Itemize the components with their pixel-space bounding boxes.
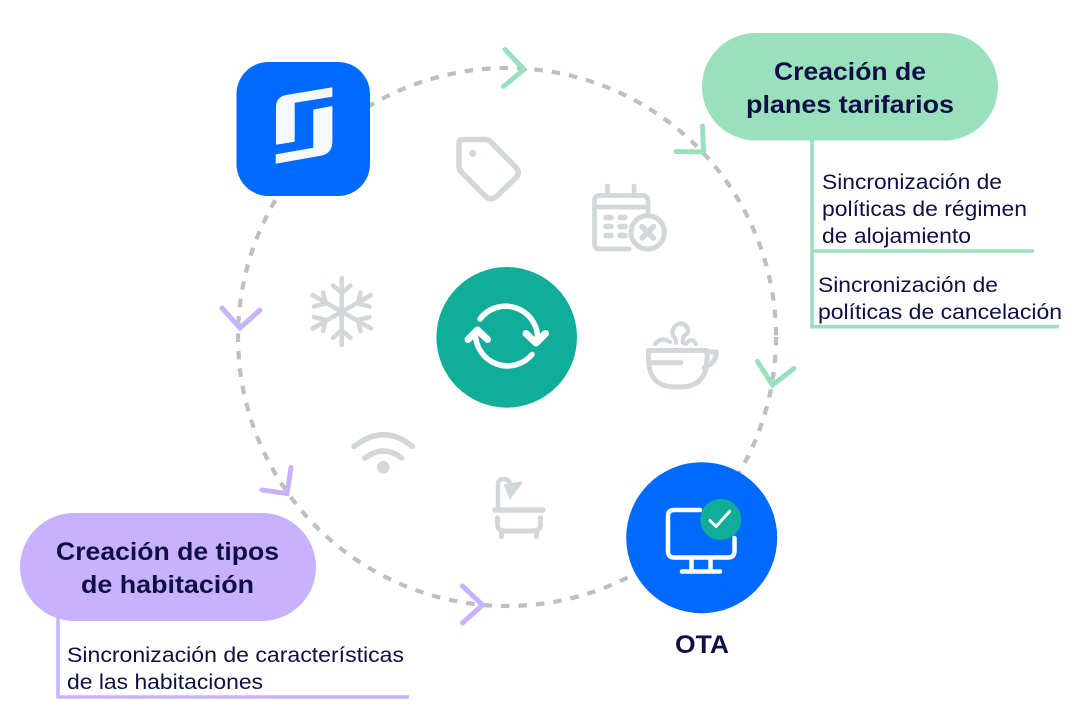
icon: price tag xyxy=(459,140,518,199)
pill: rate plans heading: Creación de xyxy=(774,58,926,86)
pill: room types heading: de habitación xyxy=(81,571,254,599)
arrowhead: bottom purple xyxy=(462,586,482,623)
text: room features sync: de las habitaciones xyxy=(67,670,263,694)
panel: rate plans xyxy=(702,33,1062,327)
icon: sync circle xyxy=(436,267,577,408)
icon: snowflake xyxy=(312,278,371,345)
panel: room types xyxy=(20,513,410,697)
dashed cycle ring xyxy=(238,68,776,606)
icon: OTA monitor xyxy=(626,462,777,613)
text: board policy sync: de alojamiento xyxy=(822,224,971,248)
arrowhead: top green xyxy=(504,50,524,86)
icon: wifi xyxy=(354,435,412,474)
connector lines: room types xyxy=(58,618,409,697)
icon: calendar with cancel mark xyxy=(594,186,664,249)
text: cancellation policy sync: Sincronización de xyxy=(818,273,998,297)
text: room features sync: Sincronización de características xyxy=(67,643,404,667)
connector lines: rate plans xyxy=(812,138,1059,327)
pill: room types heading: Creación de tipos xyxy=(56,538,279,566)
icon: app logo xyxy=(236,62,370,196)
arrowhead: lower left purple xyxy=(262,468,291,494)
arrowhead: left purple xyxy=(222,308,260,328)
icon: steaming cup xyxy=(648,324,716,387)
icon: bathtub xyxy=(495,479,543,536)
arrowhead: right green xyxy=(758,362,794,385)
pill: rate plans heading: planes tarifarios xyxy=(746,91,954,119)
arrowhead: upper right green xyxy=(676,126,704,152)
pill: rate plans heading xyxy=(702,33,998,140)
text: board policy sync: políticas de régimen xyxy=(822,197,1027,221)
pill: room types heading xyxy=(20,513,316,621)
text: cancellation policy sync: políticas de cancelación xyxy=(818,300,1062,324)
text: board policy sync: Sincronización de xyxy=(822,170,1002,194)
label: OTA: OTA xyxy=(675,631,729,659)
